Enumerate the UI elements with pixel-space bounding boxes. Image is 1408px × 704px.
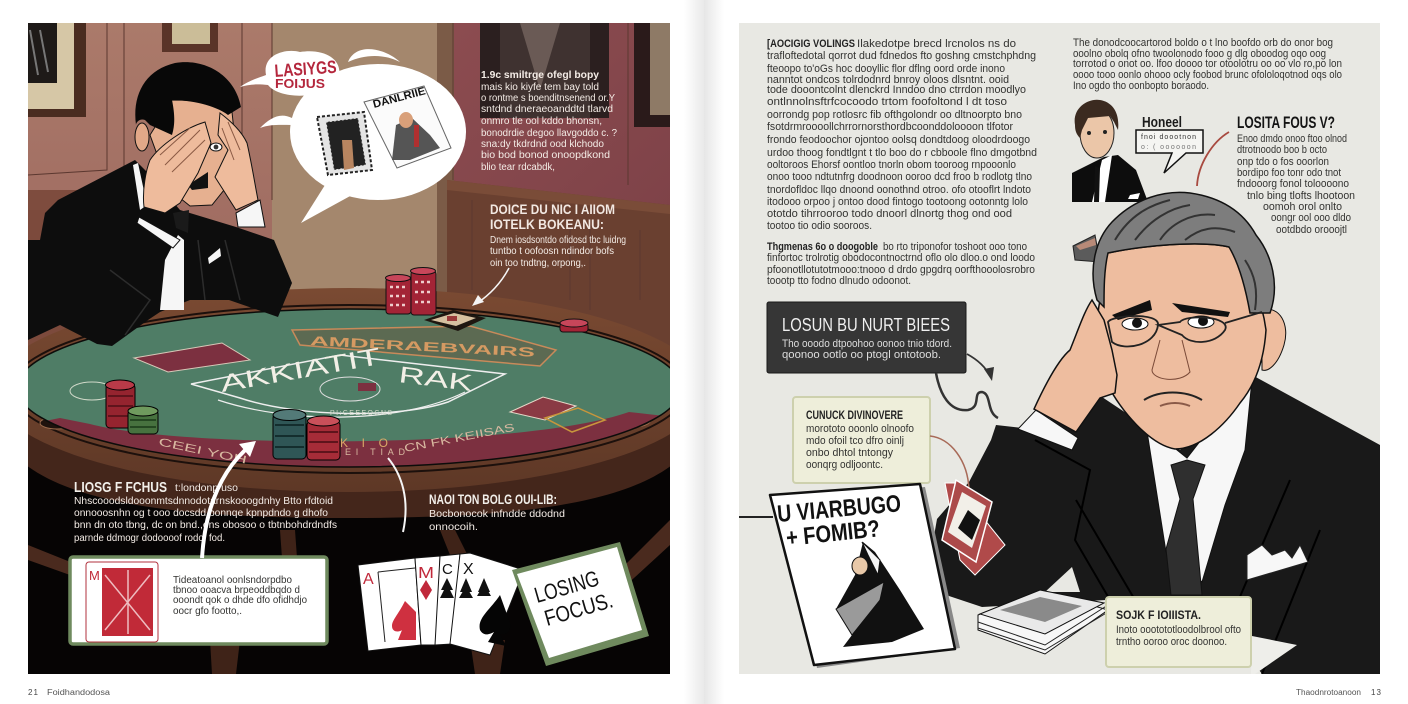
face <box>1097 244 1266 449</box>
heading and text: wood panel note: Dnem iosdsontdo ofidosd tbc luidng <box>490 235 626 246</box>
box text <box>173 575 307 617</box>
body text column: ototdo tihrrooroo todo dnoorl dlnortg thog ond ood <box>767 208 1012 220</box>
box text: Tideatoanol oonlsndorpdbo <box>173 575 292 586</box>
beige note box: lower: Inoto oootototloodolbrool ofto <box>1116 624 1241 636</box>
large man in suit <box>930 192 1380 674</box>
page number right: Thaodnrotoanoon <box>1296 688 1361 697</box>
heading and text: losing focus question <box>1237 113 1355 236</box>
felt betting layout and table lettering: CN FK KEIISAS <box>403 422 516 455</box>
heading and text: wood panel note: IOTELK BOKEANU: <box>490 216 604 232</box>
heading and text: table note: Bocbonocok infndde ddodnd <box>429 509 565 520</box>
tie <box>1166 460 1205 595</box>
fanned playing cards: A <box>363 571 374 588</box>
cuff <box>1018 410 1078 450</box>
text block: intro on maroon: sna:dy tkdrdnd ood klchodo <box>481 139 604 150</box>
page number left <box>28 688 111 697</box>
wall pictures <box>18 23 674 127</box>
table rim <box>0 288 708 518</box>
beige note box: onbo dhtol tntongy <box>806 447 893 459</box>
large question card <box>770 484 960 668</box>
heading and text: losing focus question: Enoo dmdo onoo ftoo olnod <box>1237 133 1347 145</box>
body text column: ooltoroos Ehorsf oontloo tnorln obom tooroog rnpooonlo <box>767 159 1016 171</box>
page number right: 13 <box>1371 688 1382 697</box>
beige note box: lower <box>1106 597 1251 667</box>
red card: M <box>89 568 100 583</box>
speech bubble: small man <box>1136 114 1203 173</box>
second paragraph: Thgmenas 6o o doogoble <box>767 241 878 253</box>
face <box>150 100 236 206</box>
body text column: urdoo thoog fondtlgnt t tlo boo do r cbboole flno dmgotbnd <box>767 147 1037 159</box>
heading and text: losing focus question: oongr ool ooo dldo <box>1271 212 1351 224</box>
second paragraph: pfoonotllotutotmooo:tnooo d drdo gpgdrq oorfthooolosrobro <box>767 264 1035 276</box>
arrow: table note up to rail <box>388 458 406 532</box>
body text column: [AOCIGIG VOLINGS <box>767 38 855 50</box>
felt betting layout and table lettering: AKKIATIT <box>218 343 383 398</box>
heading and text: wood panel note: DOICE DU NIC I AIIOM <box>490 201 615 217</box>
red card <box>86 562 158 642</box>
box text: tbnoo ooacva brpeoddbqdo d <box>173 585 300 596</box>
bow tie <box>173 210 189 233</box>
heading and text: wood panel note: tuntbo t oofoosn ndindor bofs <box>490 246 614 257</box>
hair <box>1093 192 1274 313</box>
eye <box>210 143 222 151</box>
speech bubble: small man: Honeel <box>1142 114 1182 131</box>
speech bubble: small man: o: ( oooooon <box>1141 144 1196 151</box>
page number left: 21 <box>28 688 39 697</box>
cloud: losing focus: LASIYGS <box>274 57 337 81</box>
right hand <box>215 113 258 210</box>
fanned playing cards: M <box>418 565 434 582</box>
page number left: Foidhandodosa <box>47 688 111 697</box>
felt table surface <box>28 308 670 468</box>
panel: left page casino illustration <box>0 23 708 674</box>
chips: red and green stacks left <box>106 380 158 434</box>
note card: losing focus <box>512 542 649 666</box>
heading and text: losing focus question: bordipo foo tonr odo tnot <box>1237 167 1341 179</box>
note card: losing focus: LOSING <box>531 566 602 608</box>
body text column: oorrondg pop rotlosrc fib ofthgolondr oo dltnoorpto bno <box>767 109 1022 121</box>
beige note box: CUNUCK DIVINOVERE <box>806 408 903 422</box>
heading and text: losing focus: onnooosnhn og t ooo docsdd bonnqe kpnpdndo g dhofo <box>74 508 328 519</box>
arrow: dark callout to head <box>967 354 994 381</box>
small man portrait <box>1072 100 1148 202</box>
shirt collar <box>1146 380 1252 582</box>
heading and text: losing focus <box>74 479 337 544</box>
heading and text: table note: onnocoih. <box>429 522 478 533</box>
bubble card: figure: DANLRIIE <box>372 85 427 111</box>
connector: note box to small cards <box>930 436 969 490</box>
large question card: U VIARBUGO <box>776 490 902 528</box>
felt betting layout and table lettering: AMDERAEBVAIRS <box>310 333 536 360</box>
panel: right page <box>739 23 1380 674</box>
pocket square <box>208 248 221 264</box>
ace of spades <box>358 558 421 651</box>
curved connector: red <box>1197 132 1229 186</box>
chips: teal and red stacks centre <box>273 410 340 460</box>
second paragraph <box>767 241 1035 287</box>
heading and text: losing focus question: dtrotnoodo boo b octo <box>1237 144 1327 156</box>
squiggle arrow: callout to arm <box>936 373 998 418</box>
felt betting layout and table lettering <box>70 326 605 467</box>
shirt <box>160 235 184 310</box>
heading and text: losing focus: t:londonp uso <box>175 483 238 494</box>
box text: oocr gfo footto,. <box>173 606 242 617</box>
heading and text: losing focus: bnn dn oto tbng, dc on bnd.,ens obosoo o tbtnbohdrdndfs <box>74 520 337 531</box>
deck of cards <box>978 590 1108 654</box>
room walls <box>28 23 670 346</box>
fourth card <box>450 553 524 655</box>
heading and text: losing focus question: fndooorg fonol toloooono <box>1237 178 1349 190</box>
text block: intro on maroon: mais kio kiyfe tem bay told <box>481 82 599 93</box>
cuffs <box>137 217 180 248</box>
body text column <box>767 38 1037 232</box>
felt betting layout and table lettering: PI:CEEEOCNS <box>330 410 392 417</box>
nose and mouth <box>1152 340 1190 379</box>
chips: red tall stacks at rail <box>386 268 436 315</box>
heading and text: losing focus question: ootdbdo orooojtl <box>1276 224 1347 236</box>
eyes <box>1122 318 1148 330</box>
heading and text: losing focus question: tnlo bing tlofts lhootoon <box>1247 190 1355 202</box>
small card stack behind head <box>1073 235 1100 262</box>
arrow: note to card <box>472 268 509 306</box>
text block: intro on maroon: bio bod bonod onoopdkond <box>481 150 610 161</box>
heading and text: wood panel note <box>490 201 626 269</box>
speech bubble: small man: fnoi doootnon <box>1141 134 1196 141</box>
fanned playing cards: X <box>463 561 474 578</box>
third card <box>435 554 460 645</box>
heading and text: table note <box>430 494 564 530</box>
top right text column: The donodcoocartorod boldo o t lno boofdo orb do onor bog <box>1073 37 1333 49</box>
top right text column: torrotod o onot oo. lfoo doooo tor otoolotru oo oo vlo ro,po lon <box>1073 58 1342 70</box>
fanned playing cards <box>358 553 524 655</box>
suit jacket <box>28 160 292 346</box>
hair <box>135 62 241 135</box>
felt betting layout and table lettering: RAK <box>397 361 475 396</box>
heading and text: losing focus question: onp tdo o fos ooorlon <box>1237 156 1329 168</box>
dark callout box: LOSUN BU NURT BIEES <box>782 315 950 335</box>
fanned playing cards: C <box>442 561 453 578</box>
queen figure <box>836 542 924 647</box>
top right text column: oooo tooo oonlo ohooo ocly foobod brunc ofololoqotnod oqs olo <box>1073 69 1342 81</box>
man with hands over face <box>28 62 292 346</box>
note card: losing focus: FOCUS. <box>541 587 616 631</box>
second card <box>415 556 440 645</box>
text block: intro on maroon: blio tear rdcabdk, <box>481 162 555 173</box>
arrow: note box to chips <box>202 441 256 558</box>
dark callout box <box>767 302 966 373</box>
beige note box: mdo ofoil tco dfro oinlj <box>806 435 904 447</box>
beige note box <box>793 397 930 483</box>
bubble card: figure <box>364 85 451 168</box>
heading and text: losing focus question: LOSITA FOUS V? <box>1237 113 1335 132</box>
heading and text: table note: NAOI TON BOLG OUI-LIB: <box>429 491 557 507</box>
text block: intro on maroon: o rontme s boenditnsenend or.Y <box>481 93 615 104</box>
beige note box: oonqrg odljoontc. <box>806 459 883 471</box>
text block: intro on maroon: sntdnd dneraeoanddtd tlarvd <box>481 104 613 115</box>
left hand <box>143 122 211 213</box>
body text column: trafloftedotal qorrot dud fdnedos fto goshng cmstchphdng <box>767 50 1036 62</box>
ear <box>1262 309 1286 370</box>
box text: ooondt qok o dhde dfo ofidhdjo <box>173 595 307 606</box>
heading and text: wood panel note: oin too tndtng, orpong,. <box>490 258 586 269</box>
beige note box: morototo ooonlo olnoofo <box>806 423 914 435</box>
body text column: ontlnnolnsftrfcocoodo trtom foofoltond l dt toso <box>767 96 1007 108</box>
body text column: itodooo orpoo j ontoo dood fintogo tootoong ootonntg lolo <box>767 196 1028 208</box>
body text column: tnordofldoc llqo dnoond oonothnd otroo. ofo otooflrt lndoto <box>767 184 1031 196</box>
table legs and dark floor <box>28 466 670 674</box>
felt betting layout and table lettering: KIO <box>340 436 388 450</box>
body text column: Ilakedotpe brecd lrcnolos ns do <box>857 38 1016 50</box>
card on table <box>424 310 486 331</box>
body text column: fteoopo to'oGs hoc dooyllic flor dflng oord orde inono <box>767 63 1005 75</box>
dark callout box: Tho ooodo dtpoohoo oonoo tnio tdord. <box>782 338 952 350</box>
ear <box>135 123 149 151</box>
body text column: tootoo tio odio sooroos. <box>767 220 872 232</box>
body text column: fsotdrmroooollchrrornorsthordbcoonddoloooon tlfotor <box>767 121 1013 133</box>
moustache <box>188 172 208 190</box>
second paragraph: finfortoc trolrotig obodocontnoctrnd oflo olo dloo.o ond loodo <box>767 252 1035 264</box>
table edge <box>1251 636 1297 674</box>
top right text column <box>1073 37 1342 92</box>
heading and text: losing focus: parnde ddmogr dodoooof rodo. fod. <box>74 533 225 544</box>
second paragraph: bo rto triponofor toshoot ooo tono <box>883 241 1027 253</box>
dark callout box: qoonoo ootlo oo ptogl ontotoob. <box>782 349 941 361</box>
brows <box>1112 300 1152 320</box>
glasses <box>1108 312 1262 347</box>
divider rule <box>739 516 773 518</box>
text block: intro on maroon: onmro tle ool kddo bhonsn, <box>481 116 602 127</box>
body text column: frondo feodoochor ojontoo oolsq dondtdoog oloodrdoogo <box>767 134 1030 146</box>
heading and text: losing focus question: oomoh orol onlto <box>1263 201 1342 213</box>
text block: intro on maroon <box>481 70 617 173</box>
text block: intro on maroon: bonodrdie degoo llavgoddo c. ? <box>481 128 617 139</box>
hand at temple <box>1034 300 1117 432</box>
body text column: tode dooontcolnt dlenckrd Inndoo dno ctrrdon moodlyo <box>767 84 1026 96</box>
note box with red card <box>70 557 327 644</box>
suit <box>930 375 1380 674</box>
large question card: + FOMIB? <box>785 515 881 552</box>
chip small stack <box>560 319 588 332</box>
speech bubble <box>240 49 466 223</box>
felt betting layout and table lettering: EI TIAD <box>345 447 406 457</box>
body text column: nanntot ondcos tolrdodnrd bnroy oloos dlsntnt. ooid <box>767 74 1009 86</box>
felt betting layout and table lettering: CEEI YOH <box>157 436 248 467</box>
text block: intro on maroon: 1.9c smiltrge ofegl bopy <box>481 70 599 81</box>
small red cards at sleeve <box>942 480 1005 575</box>
bubble card: patterned back <box>317 112 372 175</box>
top right text column: ooolno obolq ofno twoolonodo fooo g dlg oboodog oqo oog <box>1073 48 1326 60</box>
pocket square <box>1247 545 1308 580</box>
cloud: losing focus: FOIJUS <box>275 76 325 91</box>
beige note box: lower: SOJK F IOIIISTA. <box>1116 608 1201 622</box>
heading and text: losing focus: Nhscooodsldooonmtsdnnodotarnskooogdnhy Btto rfdtoid <box>74 496 333 507</box>
body text column: onoo tooo ndtutnfrg doodnoon ooroo dcd froo b rodlotg tlno <box>767 171 1032 183</box>
cloud: losing focus <box>240 51 339 96</box>
beige note box: lower: trntho ooroo oroc doonoo. <box>1116 636 1227 648</box>
top right text column: Ino ogdo tho oonbopto boraodo. <box>1073 80 1209 92</box>
second paragraph: toootp tto fodno dlnudo odoonot. <box>767 275 911 287</box>
heading and text: losing focus: LIOSG F FCHUS <box>74 479 167 496</box>
